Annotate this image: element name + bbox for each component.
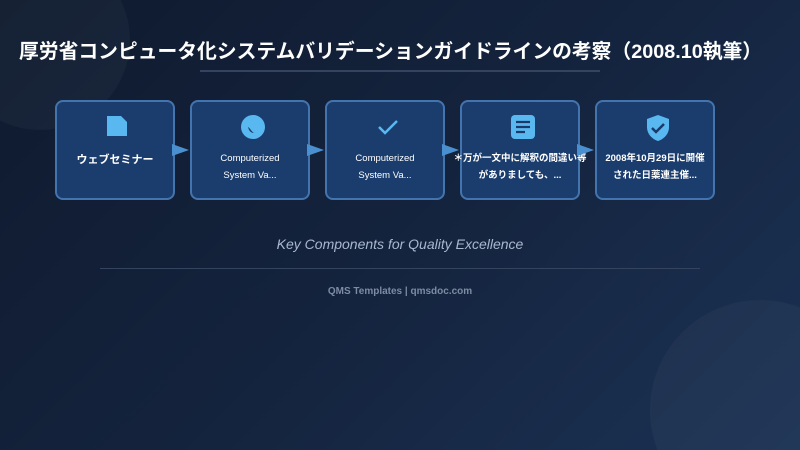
panel: step 5 <box>595 100 715 200</box>
label: step 2 <box>220 153 280 181</box>
panel: step 4 <box>460 100 580 200</box>
arrow 3 <box>442 144 459 156</box>
arrow 4 <box>577 144 594 156</box>
label: step 4: ＊万が一文中に解釈の間違い等 <box>453 153 586 164</box>
panel: step 3 <box>325 100 445 200</box>
panel: step 1 <box>55 100 175 200</box>
label: step 3: Computerized <box>355 153 415 164</box>
icon: shield <box>647 115 669 141</box>
subtitle: Key Components for Quality Excellence <box>277 236 523 252</box>
label: step 5: された日薬連主催... <box>613 170 697 181</box>
icon: note <box>511 115 535 139</box>
title: 厚労省コンピュータ化システムバリデーションガイドラインの考察（2008.10執筆） <box>19 41 762 63</box>
footer: QMS Templates | qmsdoc.com <box>328 286 472 297</box>
arrow 2 <box>307 144 324 156</box>
label: step 3 <box>355 153 415 181</box>
label: step 5 <box>605 152 705 181</box>
label: step 2: System Va... <box>223 170 277 181</box>
icon: globe <box>241 115 265 139</box>
arrow 1 <box>172 144 189 156</box>
label: step 4 <box>453 152 586 181</box>
icon: document <box>107 116 127 136</box>
icon: check <box>378 120 398 135</box>
label: step 4: がありましても、... <box>479 170 561 181</box>
panel: step 2 <box>190 100 310 200</box>
label: step 1: ウェブセミナー <box>76 154 154 166</box>
label: step 3: System Va... <box>358 170 412 181</box>
label: step 5: 2008年10月29日に開催 <box>605 153 705 164</box>
label: step 2: Computerized <box>220 153 280 164</box>
